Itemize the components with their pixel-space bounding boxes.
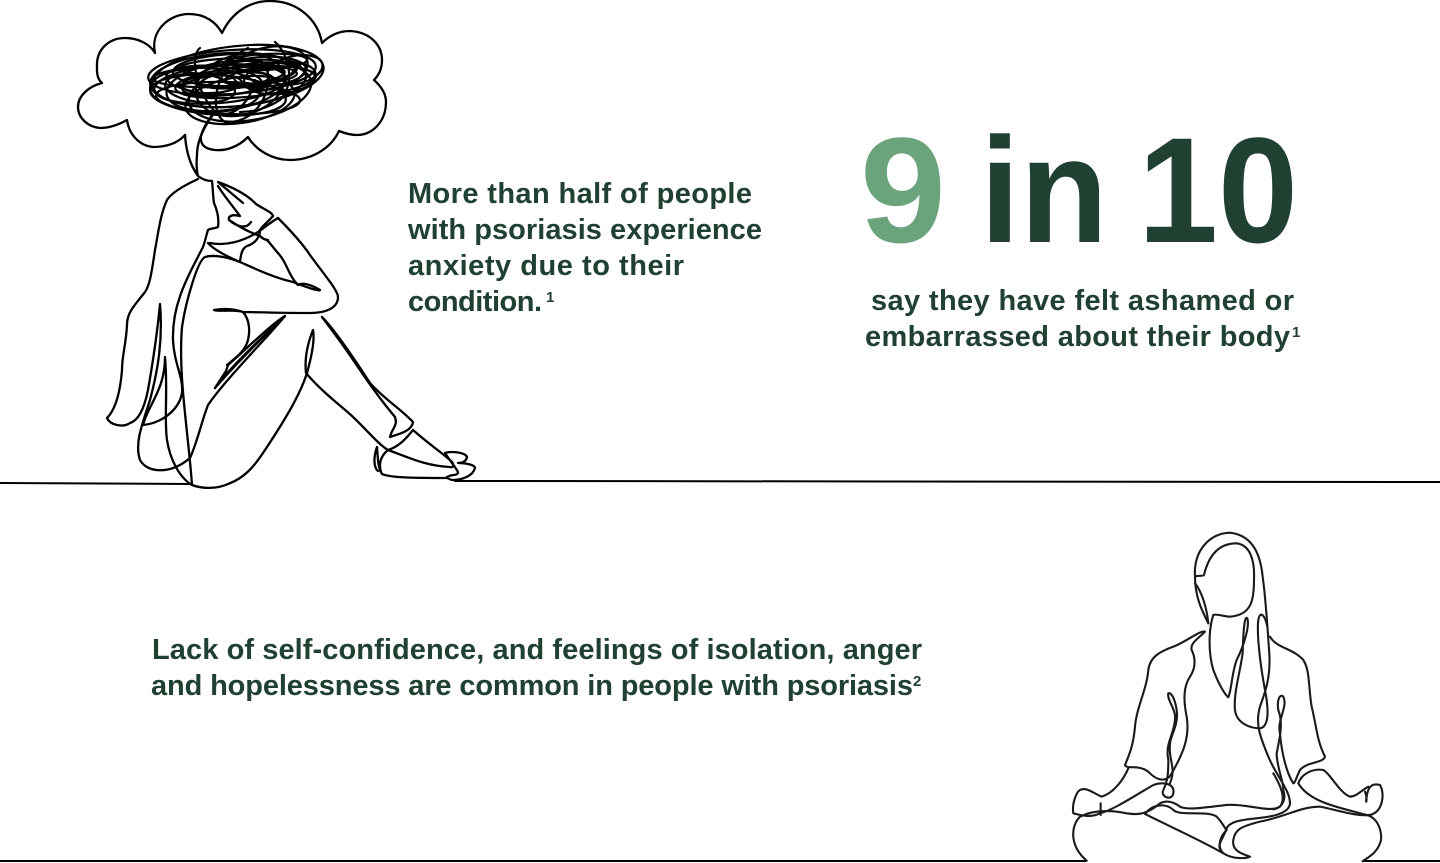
text block: common feelings: and hopelessness are common in people with psoriasis [151,670,913,702]
text block: anxiety statistic: condition. [408,286,542,318]
hand and fingers [208,182,278,262]
right shoulder and arm [1270,637,1325,809]
left sleeve loop and hand [1073,693,1177,816]
forearm line [215,316,285,388]
text block: shame statistic: embarrassed about their body [865,321,1290,353]
crossed legs and foot [1145,784,1383,858]
text block: shame statistic: say they have felt ashamed or [871,285,1294,317]
numeral: 9: 9 [860,106,946,274]
left leg and lap [1073,773,1283,861]
neck strings [185,112,215,181]
back and hair [107,179,285,470]
ground line upper [0,481,1440,484]
text block: shame statistic [865,285,1300,353]
text block: anxiety statistic: with psoriasis experience [407,214,762,246]
footnote marker: 1 [546,289,554,306]
word: in: in [980,106,1108,274]
footnote marker: 1 [1292,324,1300,341]
thigh and shin [192,317,413,488]
hair outline [1195,533,1290,850]
arm and inner body lines [143,181,320,485]
arm and knee [214,218,338,365]
face and hair strands [1195,543,1268,728]
text block: anxiety statistic: More than half of people [408,178,752,210]
text block: anxiety statistic: anxiety due to their [408,250,684,282]
illustration: person meditating cross-legged [1073,533,1383,861]
numeral: 10: 10 [1138,106,1298,274]
icon: tangled scribble [147,37,327,130]
left shoulder and arm [1125,631,1205,780]
illustration: seated person with tangled thought cloud [78,1,475,488]
footnote marker: 2 [913,673,921,690]
text block: common feelings: Lack of self-confidence, and feelings of isolation, anger [152,634,922,666]
ground line lower [0,860,1440,862]
foot and shoe [374,430,475,480]
text block: common feelings [151,634,922,702]
icon: thought cloud [78,1,386,160]
text block: anxiety statistic [407,178,762,318]
right leg [1298,770,1381,861]
headline statistic: 9 in 10 [860,106,1298,274]
